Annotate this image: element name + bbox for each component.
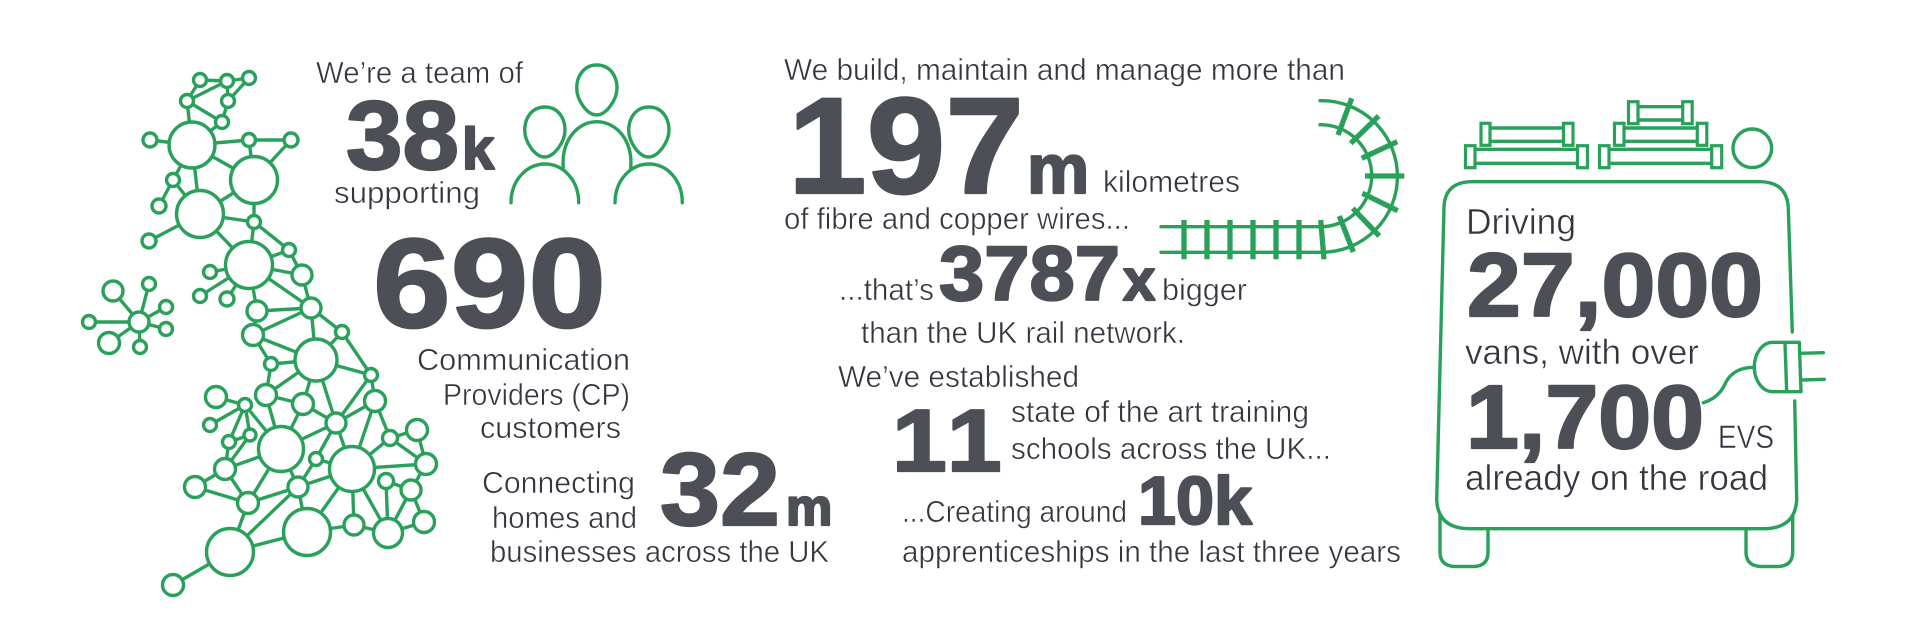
text: We've established: We’ve established [838,359,1079,394]
stat: 10k: 10k [1138,463,1252,539]
panel: van fleet [1437,102,1824,566]
text: businesses across the UK: businesses across the UK [490,534,829,569]
stat: 1,700: 1,700 [1466,368,1704,468]
icon: van wheels [1440,516,1793,566]
text: Communication: Communication [417,342,630,377]
network links of Ireland [89,284,166,347]
stat: 3787x: 3787x [939,231,1155,317]
network links of Great Britain [149,78,426,585]
text: that's: ...that’s [839,272,934,307]
text: than the UK rail network: than the UK rail network. [861,315,1185,350]
panel: fibre and copper stat [784,52,1404,350]
text: supporting: supporting [334,175,480,210]
icon: railway track [1161,98,1404,259]
icon: roof light [1733,129,1772,168]
stat: 11: 11 [892,391,1002,490]
panel: communication providers stat [373,212,630,445]
text: state of the art training: state of the art training [1011,394,1309,429]
panel: training schools stat [838,359,1401,569]
text: EVS: EVS [1718,419,1774,455]
stat: 38k: 38k [346,81,495,190]
panel: UK network map [82,72,436,596]
icon: three people [511,65,682,203]
stat: 197m: 197m [788,70,1089,223]
text: Driving: Driving [1466,201,1576,242]
panel: team stat [316,55,682,210]
network nodes of Ireland [82,278,172,354]
stat: 27,000: 27,000 [1467,236,1763,336]
text: schools across the UK: schools across the UK... [1011,431,1331,466]
icon: van body [1437,182,1797,529]
icon: plug and cable [1703,342,1824,403]
stat: 32m: 32m [660,432,832,547]
text: Creating around: ...Creating around [902,494,1127,529]
text: team intro: We’re a team of [316,55,523,90]
icon: roof pipes [1466,102,1722,168]
text: kilometres: kilometres [1103,164,1240,199]
text: customers: customers [480,410,621,445]
network nodes of Great Britain [142,72,436,596]
stat: 690: 690 [373,212,606,354]
text: already on the road: already on the road [1465,457,1768,498]
panel: connections stat [482,432,832,569]
text: vans, with over: vans, with over [1465,333,1699,372]
text: bigger: bigger [1162,272,1247,307]
text: homes and: homes and [492,500,637,535]
text: build intro: We build, maintain and manage more than [784,52,1345,87]
text: Connecting: Connecting [482,465,635,500]
text: of fibre and copper wires: of fibre and copper wires... [784,201,1130,236]
text: apprenticeships: apprenticeships in the last three years [902,534,1401,569]
text: Providers (CP): Providers (CP) [443,377,630,412]
